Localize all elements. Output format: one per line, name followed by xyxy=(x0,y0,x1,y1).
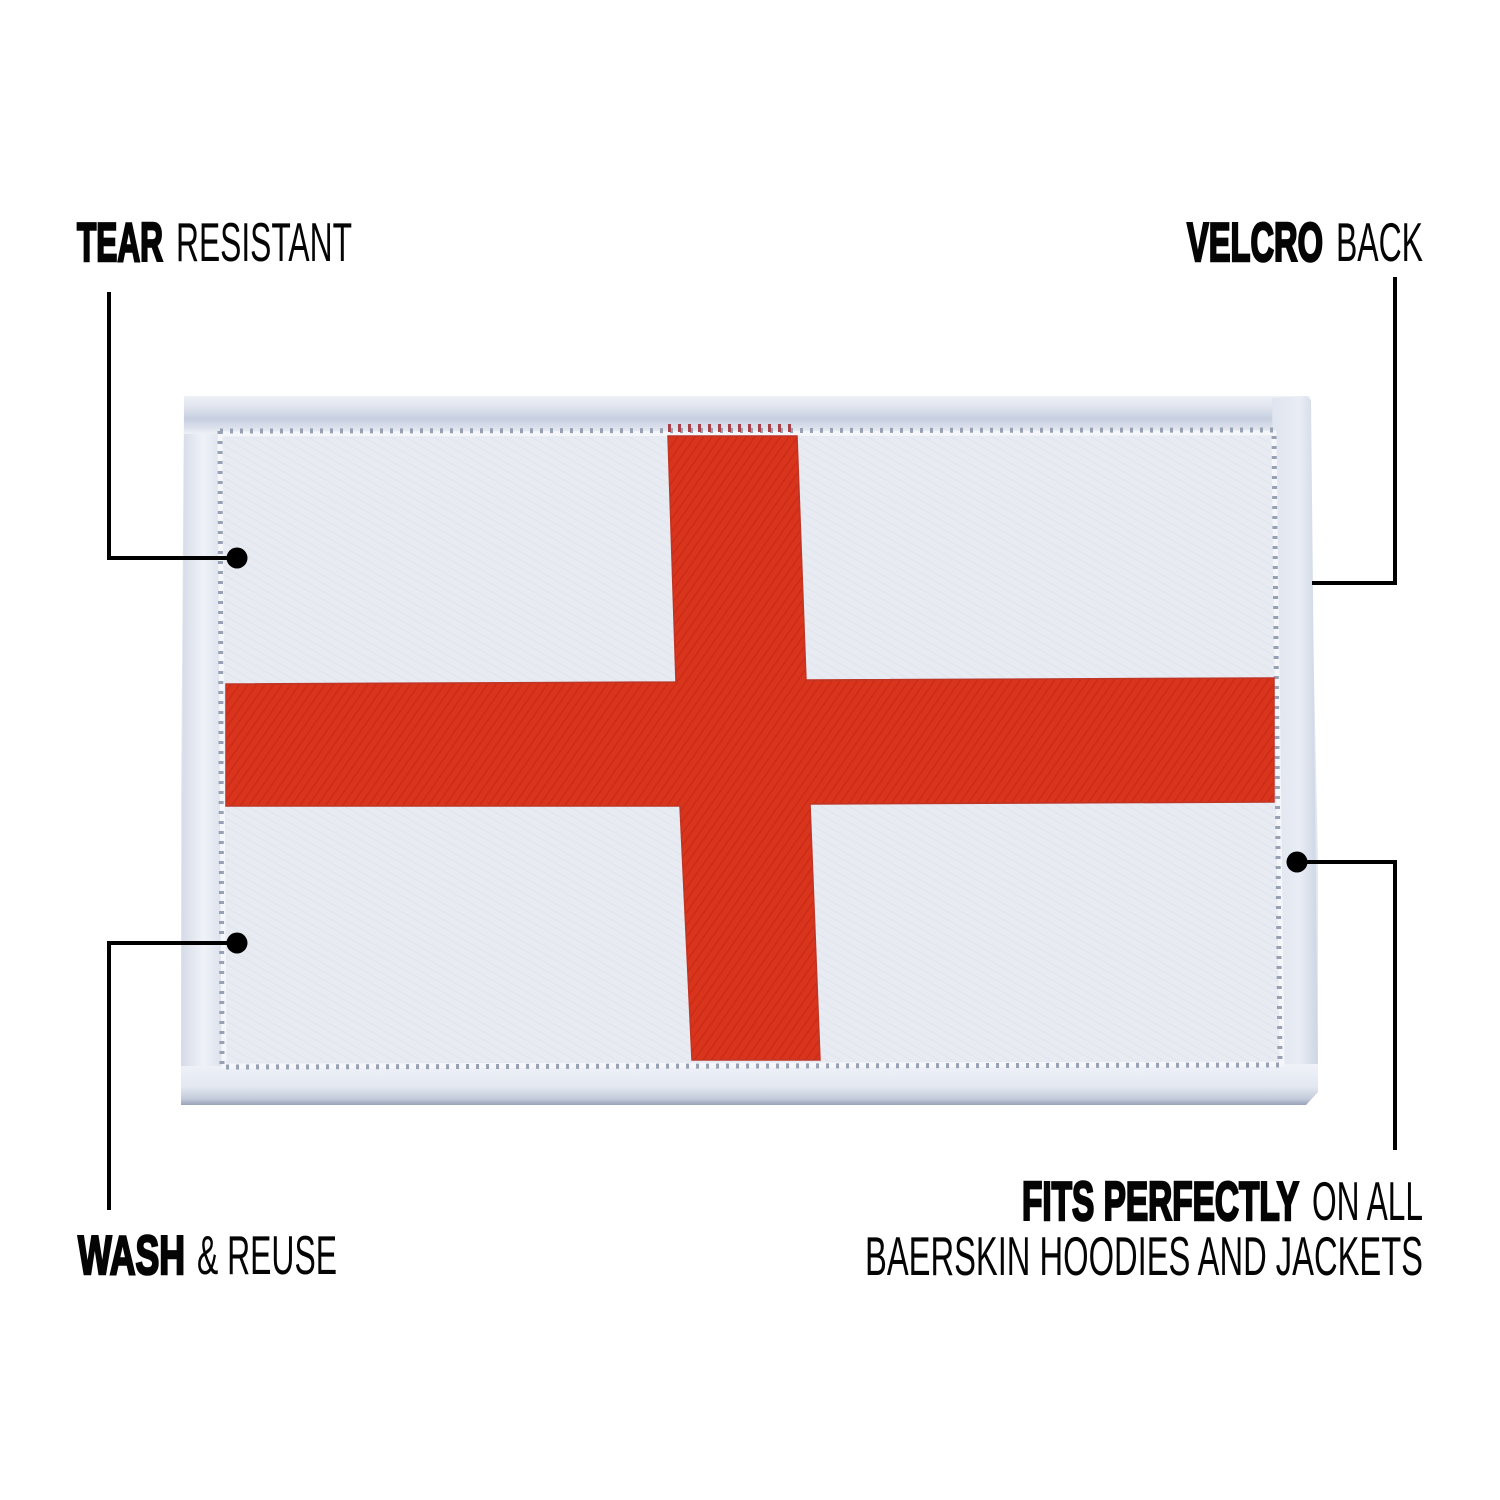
red stitch bleed at top of cross xyxy=(668,424,797,432)
marker dot xyxy=(226,932,248,954)
patch base xyxy=(181,396,1318,1105)
label: wash and reuse: & REUSE xyxy=(197,1224,337,1286)
stitching xyxy=(220,430,1280,1067)
patch border: right xyxy=(1272,396,1318,1085)
label: fits perfectly on all: FITS PERFECTLY xyxy=(1022,1170,1299,1232)
patch border: left xyxy=(181,430,226,1068)
marker dot xyxy=(1286,852,1308,872)
patch border: bottom xyxy=(181,1064,1318,1105)
label: wash and reuse: WASH xyxy=(78,1224,185,1286)
callout: velcro back xyxy=(1187,211,1423,583)
label: velcro back: VELCRO xyxy=(1187,211,1323,273)
patch border: top xyxy=(184,396,1310,434)
label: fits perfectly on all: ON ALL xyxy=(1312,1170,1423,1232)
stitching highlight xyxy=(220,433,1282,1066)
label: velcro back: BACK xyxy=(1336,211,1423,273)
marker dot xyxy=(226,548,248,568)
callout: fits perfectly xyxy=(865,852,1423,1287)
callout: wash and reuse xyxy=(78,932,337,1286)
leader line xyxy=(109,943,237,1210)
leader line xyxy=(109,292,237,558)
callout: tear resistant xyxy=(77,211,352,568)
white fabric field xyxy=(222,436,1280,1062)
leader line xyxy=(1312,277,1395,583)
flag patch xyxy=(181,396,1318,1105)
label: tear resistant: TEAR xyxy=(77,211,163,273)
leader line xyxy=(1297,862,1395,1150)
red cross of Saint George xyxy=(226,436,1274,1060)
label: tear resistant: RESISTANT xyxy=(176,211,352,273)
